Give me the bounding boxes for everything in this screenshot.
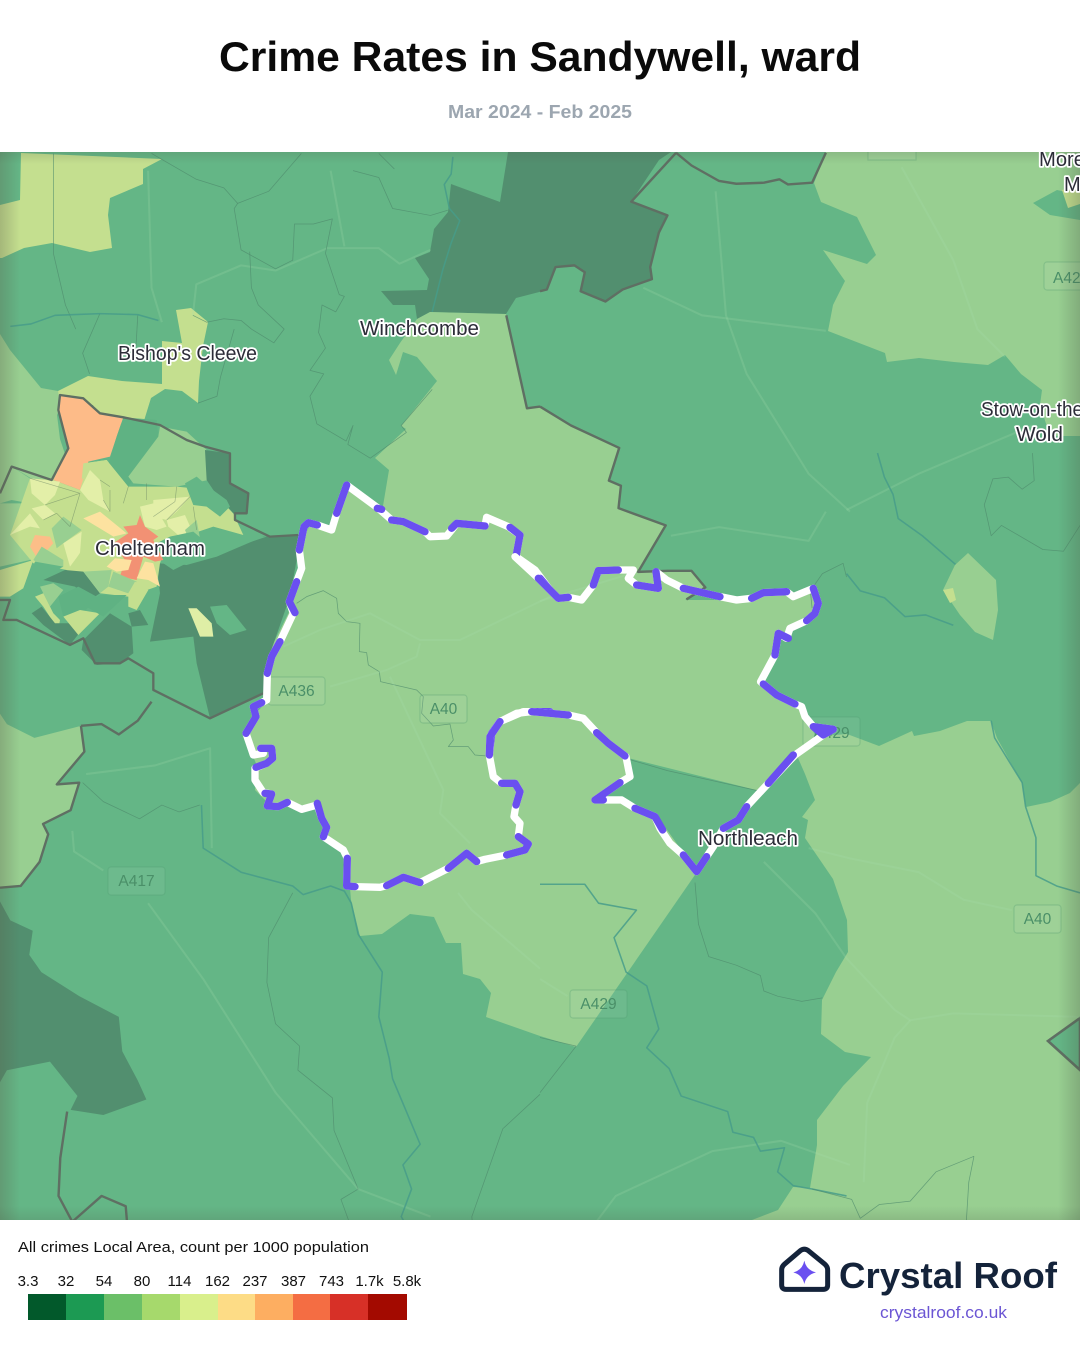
road label: A40 east xyxy=(1014,905,1061,933)
legend colour scale xyxy=(28,1294,407,1320)
legend values xyxy=(18,1273,422,1290)
logo wordmark: Crystal Roof xyxy=(839,1255,1058,1296)
area: west light green xyxy=(0,334,67,491)
legend values: 32 xyxy=(58,1273,74,1290)
ward outlines xyxy=(30,478,197,530)
legend title: All crimes Local Area, count per 1000 population xyxy=(18,1239,369,1256)
area: east light green xyxy=(752,721,1080,1220)
legend values: 387 xyxy=(281,1273,306,1290)
logo: Crystal Roof xyxy=(782,1249,1058,1322)
legend values: 114 xyxy=(168,1273,191,1290)
road label: A40 west xyxy=(420,695,467,723)
legend xyxy=(18,1239,422,1320)
place label: Wold: Wold xyxy=(1016,424,1063,446)
road label: cropped top xyxy=(868,152,916,160)
road label: A42 right edge xyxy=(1044,262,1080,290)
white footer masks xyxy=(0,1220,1080,1350)
Cheltenham urban wards xyxy=(0,395,298,718)
area: top-right light green xyxy=(814,152,1080,436)
area: Bishop's Cleeve yellow-green xyxy=(58,308,208,424)
road label: A40 east: A40 xyxy=(1024,911,1052,928)
area: south-west dark green xyxy=(0,702,540,1237)
road label: A429 south xyxy=(570,990,627,1018)
place label: Winchcombe: Winchcombe xyxy=(360,318,479,340)
area: top-left yellow-green xyxy=(0,153,162,258)
road label: A429 north xyxy=(803,717,860,746)
road label: A429 north: A429 xyxy=(813,725,850,742)
subtitle: date range: Mar 2024 - Feb 2025 xyxy=(448,102,632,122)
road label: A40 west: A40 xyxy=(430,701,458,718)
road label: A417: A417 xyxy=(118,873,155,890)
legend values: 1.7k xyxy=(355,1273,384,1290)
area: top dark green xyxy=(381,152,671,319)
area: Moreton yellow patch xyxy=(1062,185,1080,208)
icon: house with star xyxy=(782,1249,828,1289)
boundary east and south section xyxy=(489,557,833,872)
road label: A417 xyxy=(108,867,165,895)
boundary west and north section xyxy=(246,485,550,887)
place label: Northleach: Northleach xyxy=(698,828,798,850)
area: central light green including ward xyxy=(246,312,819,1047)
place label: Bishop's Cleeve: Bishop's Cleeve xyxy=(118,343,257,365)
thin boundaries, roads and rivers: south-east xyxy=(540,721,1080,1237)
road label: A436 xyxy=(268,677,325,705)
ward interior thin boundary xyxy=(283,591,550,843)
map base: mid green area xyxy=(0,152,1080,1220)
legend values: 162 xyxy=(205,1273,230,1290)
title: Crime Rates in Sandywell, ward xyxy=(219,33,861,80)
legend values: 237 xyxy=(242,1273,268,1290)
area: Bourton light patch xyxy=(943,553,998,640)
website link: crystalroof.co.uk xyxy=(880,1304,1008,1322)
legend values: 3.3 xyxy=(18,1273,38,1290)
legend values: 80 xyxy=(134,1273,150,1290)
map edge shading xyxy=(0,152,1080,1220)
area: top-right mid patch xyxy=(1033,190,1080,220)
place label: Cheltenham: Cheltenham xyxy=(95,538,205,560)
road label: A436: A436 xyxy=(278,683,315,700)
area: Bourton yellow-green inner patch xyxy=(943,588,956,603)
legend values: 743 xyxy=(319,1273,344,1290)
legend values: 54 xyxy=(96,1273,112,1290)
ward boundary: Sandywell dashed white and purple line xyxy=(246,485,833,887)
road label: A429 south: A429 xyxy=(580,996,617,1013)
thin boundaries, roads and rivers: north-west xyxy=(10,153,540,458)
legend values: 5.8k xyxy=(393,1273,422,1290)
area: diamond on right edge xyxy=(1048,1018,1080,1070)
road label: A42 right edge: A42 xyxy=(1053,270,1080,287)
thin boundaries, roads and rivers: north-east xyxy=(540,153,1080,625)
